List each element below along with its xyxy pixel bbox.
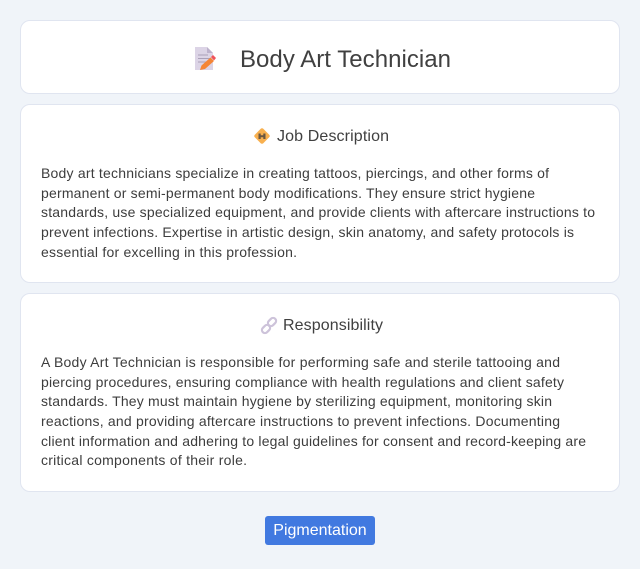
heading: job description: Job Description: [277, 128, 389, 145]
icon: document with pencil: [195, 47, 216, 70]
icon: diamond sign: [254, 128, 270, 144]
text block: job description: standards, use specialized equipment, and provide clients with aftercare instructions to: [41, 204, 595, 220]
icon: chain link: [261, 317, 277, 334]
text block: job description: [41, 165, 595, 260]
text block: responsibility: [41, 354, 586, 468]
text block: job description: Body art technicians specialize in creating tattoos, piercings, and other forms of: [41, 165, 549, 181]
panel: title: [20, 20, 620, 94]
text block: responsibility: piercing procedures, ensuring compliance with health regulations and client safety: [41, 374, 564, 390]
text block: responsibility: A Body Art Technician is responsible for performing safe and sterile tattooing and: [41, 354, 560, 370]
text block: job description: prevent infections. Expertise in artistic design, skin anatomy, and safety protocols is: [41, 224, 574, 240]
panel: responsibility: [20, 293, 620, 492]
tag: pigmentation: [265, 516, 375, 545]
text block: responsibility: standards. They must maintain hygiene by sterilizing equipment, monitoring skin: [41, 393, 552, 409]
title text: Body Art Technician: [240, 46, 451, 73]
text block: responsibility: reactions, and providing aftercare instructions to prevent infections. Documenting: [41, 413, 560, 429]
text block: job description: essential for excelling in this profession.: [41, 244, 297, 260]
text block: responsibility: critical components of their role.: [41, 452, 247, 468]
tag: pigmentation: Pigmentation: [273, 522, 367, 539]
panel: job description: [20, 104, 620, 283]
text block: responsibility: client information and adhering to legal guidelines for consent and record-keeping are: [41, 433, 586, 449]
heading: responsibility: Responsibility: [283, 317, 383, 334]
text block: job description: permanent or semi-permanent body modifications. They ensure strict hygiene: [41, 185, 535, 201]
